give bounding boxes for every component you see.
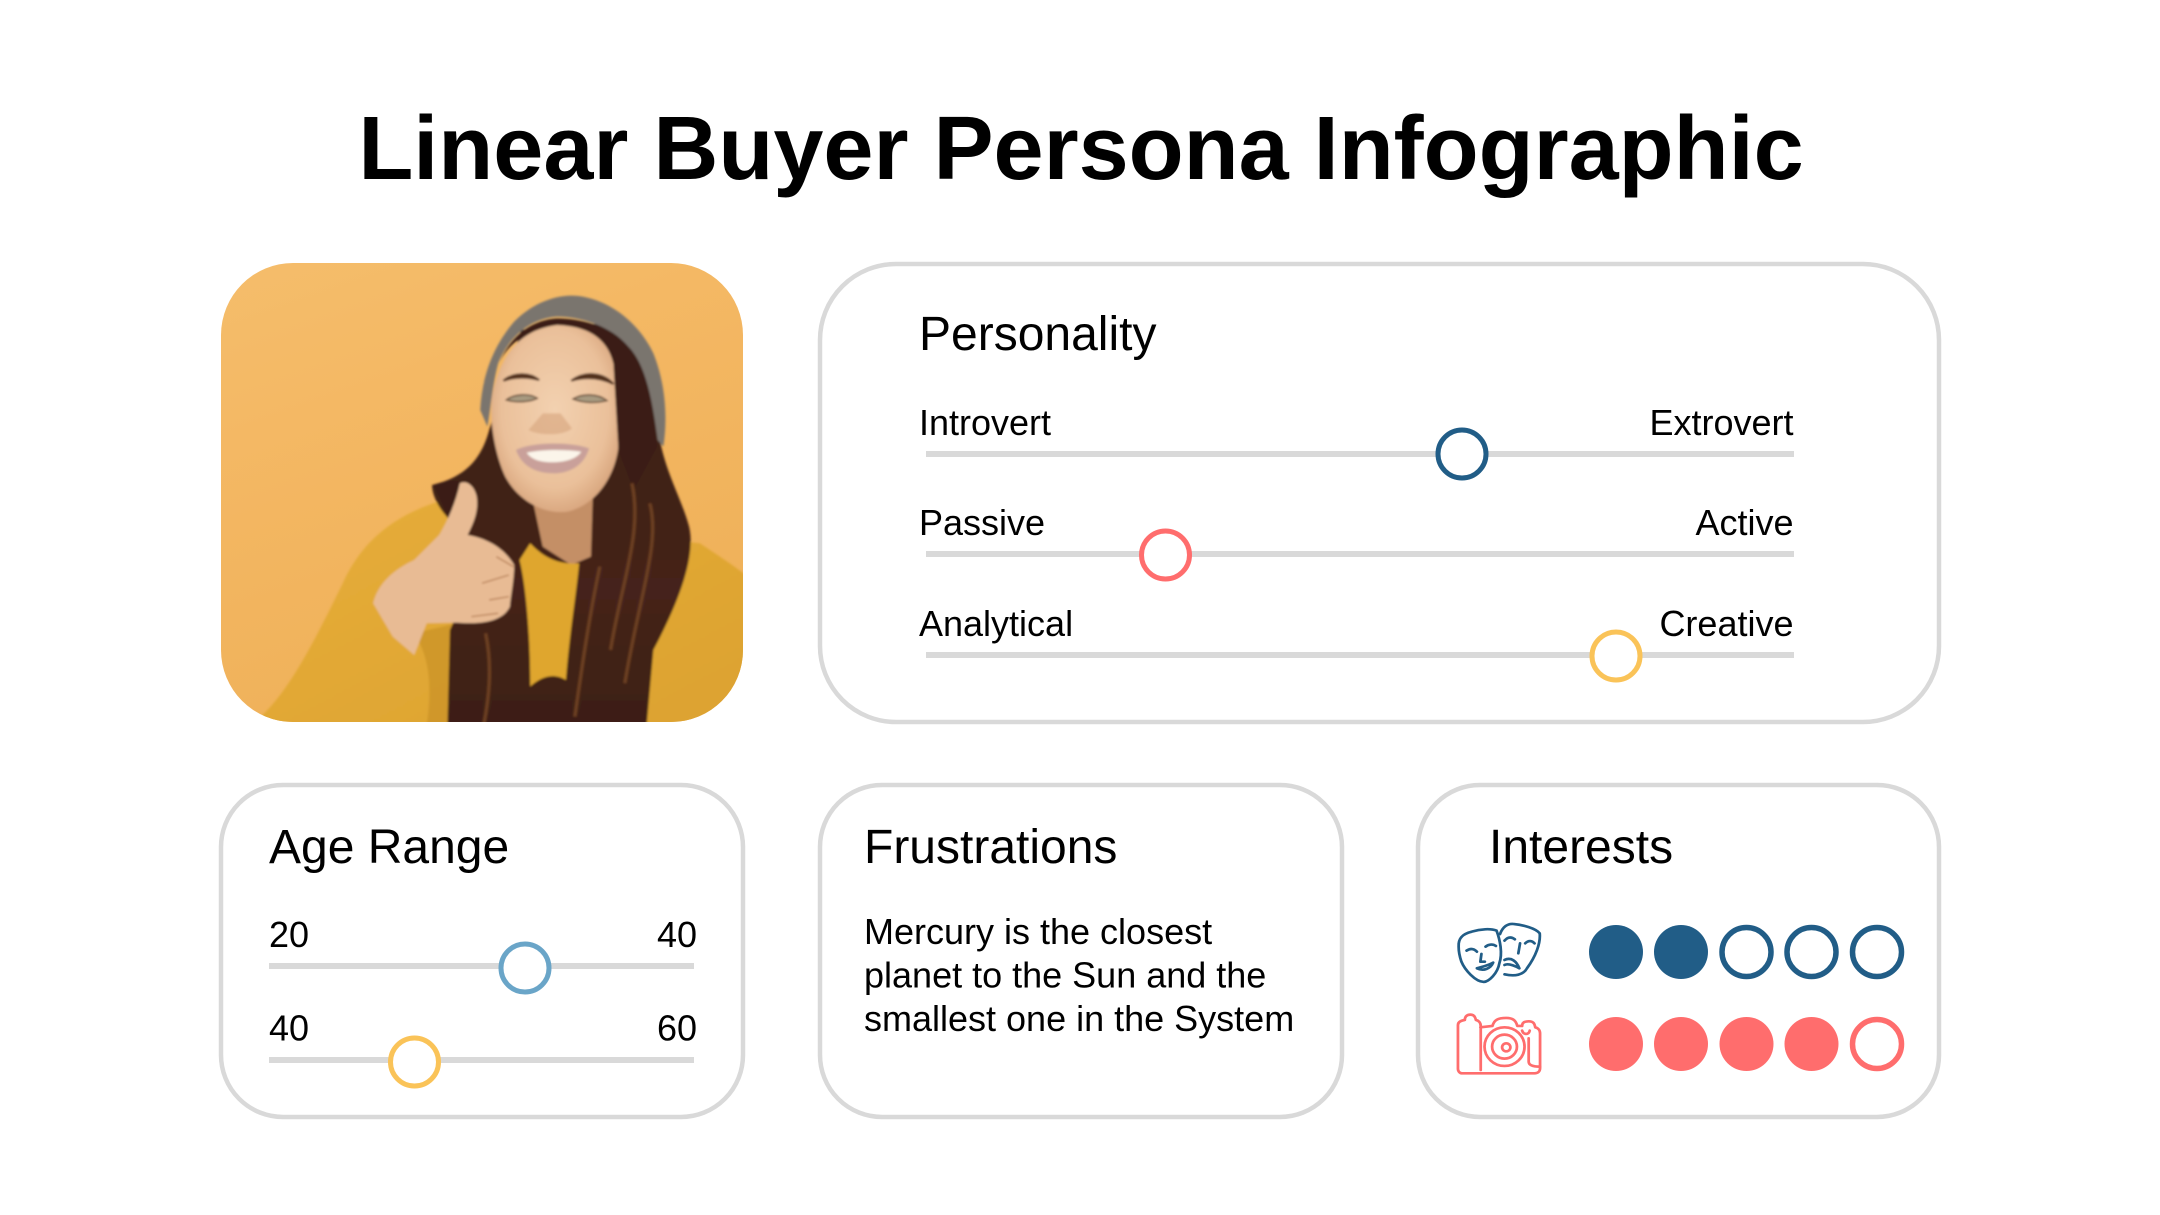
rating: theatre 2 of 5 bbox=[1589, 925, 1902, 979]
text block: frustrations description: planet to the Sun and the bbox=[864, 954, 1266, 996]
slider: introvert to extrovert bbox=[919, 402, 1794, 478]
panel: personality bbox=[820, 264, 1939, 722]
slider: introvert to extrovert: Introvert bbox=[919, 402, 1051, 443]
icon: camera bbox=[1458, 1015, 1540, 1073]
heading: age range: Age Range bbox=[269, 821, 509, 874]
slider: age 20 to 40: 20 bbox=[269, 914, 309, 955]
text block: frustrations description: smallest one in the System bbox=[864, 998, 1294, 1039]
heading: interests: Interests bbox=[1489, 821, 1673, 874]
text block: frustrations description: Mercury is the closest bbox=[864, 911, 1212, 952]
slider: analytical to creative: Analytical bbox=[919, 603, 1073, 644]
slider: analytical to creative: Creative bbox=[1659, 603, 1794, 644]
rating: photography 4 of 5 bbox=[1589, 1017, 1902, 1071]
photo: smiling woman giving a thumbs up bbox=[221, 263, 743, 722]
slider: age 40 to 60: 60 bbox=[657, 1008, 697, 1048]
slider: age 20 to 40 bbox=[269, 914, 697, 992]
icon: theatre masks bbox=[1459, 924, 1540, 982]
slider: passive to active: Passive bbox=[919, 502, 1045, 543]
slider: introvert to extrovert: Extrovert bbox=[1649, 402, 1794, 443]
slider: age 20 to 40: 40 bbox=[657, 914, 697, 955]
panel: frustrations bbox=[820, 785, 1342, 1117]
heading: personality: Personality bbox=[919, 308, 1156, 361]
slider: passive to active bbox=[919, 502, 1794, 579]
panel: interests bbox=[1418, 785, 1939, 1117]
heading: frustrations: Frustrations bbox=[864, 821, 1117, 874]
slider: analytical to creative bbox=[919, 603, 1794, 680]
slider: age 40 to 60 bbox=[269, 1008, 697, 1086]
slider: passive to active: Active bbox=[1695, 502, 1794, 543]
title: Linear Buyer Persona Infographic bbox=[358, 99, 1804, 199]
panel: age range bbox=[221, 785, 743, 1117]
slider: age 40 to 60: 40 bbox=[269, 1008, 309, 1048]
